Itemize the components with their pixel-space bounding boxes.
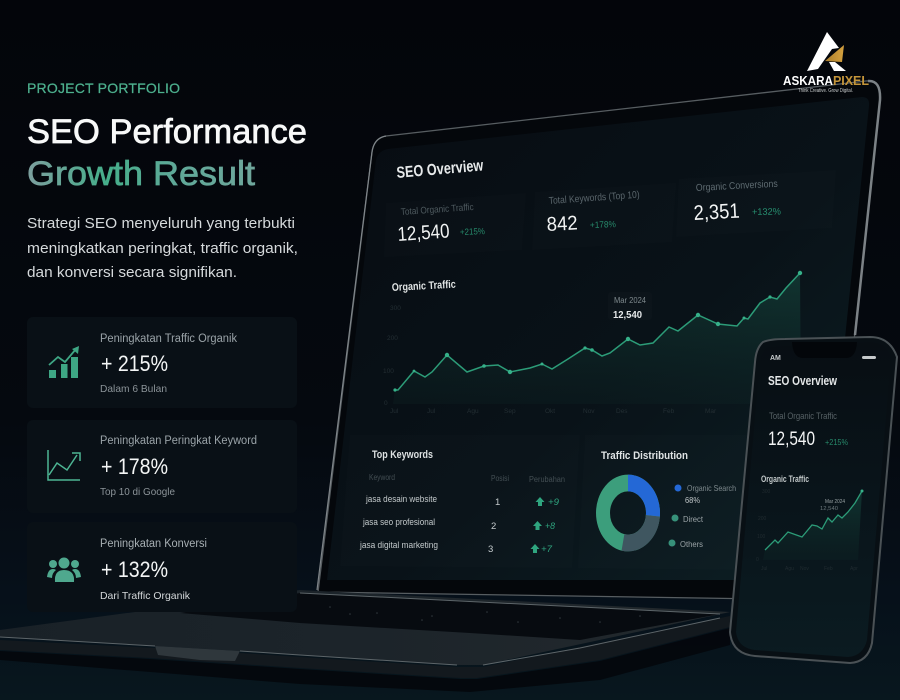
phone chart: 0 <box>756 557 759 563</box>
organic traffic line chart: Okt <box>545 408 555 415</box>
base highlights <box>0 593 720 665</box>
logo: PIXEL <box>833 74 869 88</box>
organic traffic line chart: 0 <box>384 400 388 407</box>
stat card: total keywords: +178% <box>590 219 616 230</box>
stat card: organic conversions: 2,351 <box>693 200 740 225</box>
panel: keyword metric: + 178% <box>101 454 168 479</box>
organic traffic line chart: Nov <box>583 408 595 415</box>
phone chart: 200 <box>758 516 767 522</box>
organic traffic line chart: Sep <box>504 408 516 415</box>
chart tooltip: Mar 2024 <box>614 296 647 305</box>
panel: top keywords: Keyword <box>369 473 395 482</box>
stat card: organic conversions <box>676 170 836 237</box>
panel: conversion metric <box>27 522 297 612</box>
phone stat: Total Organic Traffic <box>769 411 837 422</box>
panel: traffic metric: + 215% <box>101 351 168 376</box>
stat card: total keywords: 842 <box>546 212 578 236</box>
description <box>27 216 298 281</box>
phone chart <box>756 474 864 572</box>
panel: keyword metric: Top 10 di Google <box>100 486 175 498</box>
organic traffic line chart: Jul <box>390 408 399 415</box>
logo tagline: Think Creative. Grow Digital. <box>798 88 853 94</box>
organic traffic line chart: Feb <box>663 408 675 415</box>
panel: top keywords: 2 <box>491 521 496 532</box>
panel: top keywords: jasa digital marketing <box>359 540 438 551</box>
phone body <box>730 337 897 663</box>
laptop screen <box>327 97 869 580</box>
panel: conversion metric: Peningkatan Konversi <box>100 538 207 550</box>
donut legend: Direct <box>683 514 704 524</box>
icon: line chart <box>48 450 80 480</box>
phone chart: Mar 2024 <box>825 499 845 505</box>
phone chart: Feb <box>824 566 833 572</box>
panel: keyword metric: Peningkatan Peringkat Keyword <box>100 435 257 447</box>
organic traffic line chart: Organic Traffic <box>392 279 456 294</box>
phone stat <box>768 411 848 450</box>
panel: keyword metric <box>27 420 297 513</box>
donut chart <box>603 483 653 543</box>
phone chart: 100 <box>757 534 766 540</box>
phone title: SEO Overview <box>768 374 837 388</box>
title <box>27 113 307 193</box>
organic traffic line chart: Jul <box>427 408 436 415</box>
stat card: total organic traffic: 12,540 <box>397 220 450 246</box>
change indicators: +7 <box>541 544 553 555</box>
phone chart: Agu <box>785 566 794 572</box>
lid left edge highlight <box>317 136 386 590</box>
laptop shadow <box>0 628 730 692</box>
description: meningkatkan peringkat, traffic organik, <box>27 241 298 257</box>
donut legend <box>668 483 736 549</box>
laptop base deck <box>0 590 730 665</box>
change indicators: +9 <box>548 497 560 508</box>
donut legend: Organic Search <box>687 483 736 493</box>
panel: traffic distribution <box>578 435 760 570</box>
stat card: total organic traffic <box>384 193 526 257</box>
donut legend: 68% <box>685 495 700 505</box>
logo wordmark: ASKARA <box>783 74 833 88</box>
panel: top keywords: 3 <box>488 544 493 555</box>
phone chart: 12,540 <box>820 506 838 512</box>
organic traffic line chart: Mar <box>705 408 717 415</box>
organic traffic line chart: Agu <box>467 408 479 415</box>
logo mark <box>807 32 846 71</box>
chart tooltip: 12,540 <box>613 309 642 321</box>
change indicators: +8 <box>545 521 556 532</box>
organic traffic line chart <box>383 271 802 415</box>
phone chart: Jul <box>761 566 767 572</box>
icon: people <box>47 558 81 582</box>
stat card: total keywords: Total Keywords (Top 10) <box>548 190 640 207</box>
dashboard title: SEO Overview <box>396 157 484 182</box>
keyboard <box>180 593 720 640</box>
status bar: AM <box>770 355 781 362</box>
phone chart: 300 <box>762 489 771 495</box>
stat card: total organic traffic: Total Organic Traffic <box>400 202 474 218</box>
panel: top keywords: Posisi <box>491 474 509 483</box>
description: Strategi SEO menyeluruh yang terbukti <box>27 216 295 232</box>
panel: conversion metric: Dari Traffic Organik <box>100 590 191 602</box>
organic traffic line chart: 200 <box>387 335 398 342</box>
phone chart: Organic Traffic <box>761 474 809 485</box>
phone notch <box>792 342 857 358</box>
panel: conversion metric: + 132% <box>101 557 168 582</box>
lid right edge highlight <box>855 81 880 335</box>
phone stat: +215% <box>825 437 848 447</box>
description: dan konversi secara signifikan. <box>27 265 237 281</box>
panel: top keywords: Perubahan <box>529 475 565 484</box>
trackpad notch <box>155 646 240 661</box>
stat card: total organic traffic: +215% <box>460 226 485 237</box>
phone screen <box>736 342 891 657</box>
stat card: total keywords <box>532 183 676 250</box>
panel: top keywords <box>340 435 580 568</box>
laptop lid <box>318 81 880 600</box>
stat card: organic conversions: +132% <box>752 206 782 218</box>
status bar <box>770 355 876 362</box>
phone chart: Nov <box>800 566 809 572</box>
panel: top keywords: jasa seo profesional <box>362 517 435 528</box>
change indicators <box>530 497 560 555</box>
eyebrow: PROJECT PORTFOLIO <box>27 80 180 96</box>
title: SEO Performance <box>27 113 307 151</box>
panel: traffic metric: Dalam 6 Bulan <box>100 383 167 395</box>
panel: traffic distribution: Traffic Distribution <box>601 450 688 462</box>
donut legend: Others <box>680 539 703 549</box>
organic traffic line chart: Des <box>616 408 628 415</box>
chart tooltip <box>608 292 652 321</box>
panel: traffic metric <box>27 317 297 408</box>
phone stat: 12,540 <box>768 429 815 450</box>
panel: traffic metric: Peningkatan Traffic Organik <box>100 333 237 345</box>
phone chart: Apr <box>850 566 858 572</box>
panel: top keywords: 1 <box>495 497 500 508</box>
organic traffic line chart: 300 <box>390 305 401 312</box>
logo <box>783 32 869 94</box>
panel: top keywords: jasa desain website <box>365 494 437 505</box>
phone <box>730 337 897 663</box>
title: Growth Result <box>27 155 256 193</box>
stat card: organic conversions: Organic Conversions <box>696 179 778 194</box>
laptop front lip <box>0 616 730 678</box>
panel: top keywords: Top Keywords <box>372 449 433 461</box>
icon: rising bars <box>49 346 79 378</box>
organic traffic line chart: 100 <box>383 368 394 375</box>
